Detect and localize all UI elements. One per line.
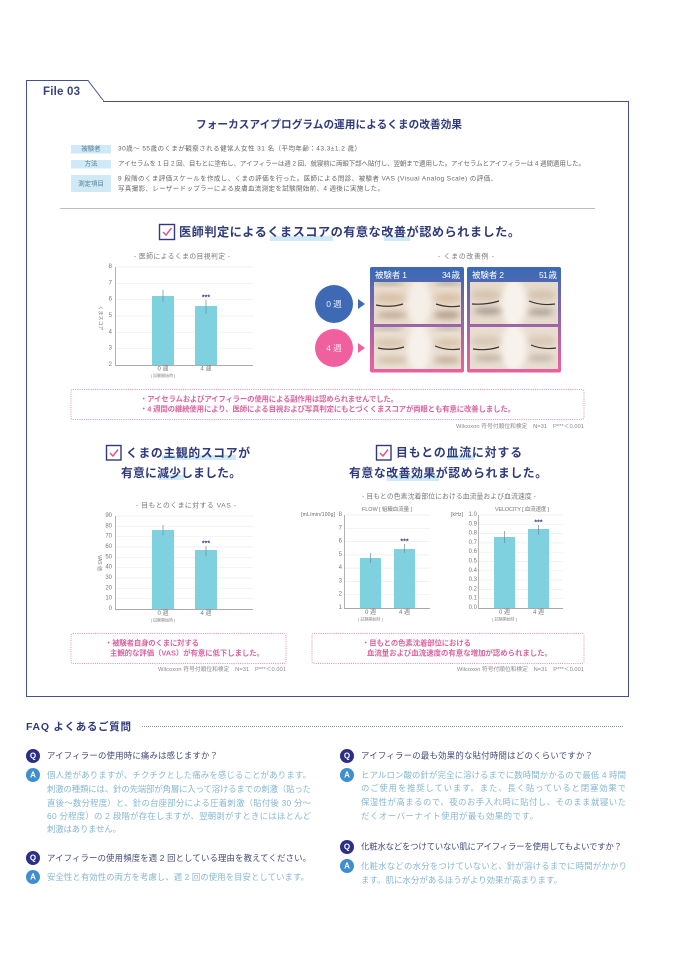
bar chart: flow: FLOW [ 組織血流量 ] [362, 505, 412, 513]
bar chart: doctor visual score: 8 [109, 264, 113, 270]
heading: blood flow: 有意な改善効果が認められました。 [349, 466, 547, 480]
bar chart: velocity: *** [534, 520, 543, 526]
callout: blood flow results: 血流量および血流速度の有意な増加が認められました。 [367, 648, 552, 658]
0 week circle [315, 285, 365, 323]
bar chart: velocity: 4 週 [533, 608, 544, 616]
measures row [71, 174, 497, 192]
bar chart: doctor visual score: - 医師によるくまの目視判定 - [134, 252, 230, 260]
panel: subject 1: 被験者 1 [375, 270, 407, 280]
FAQ 2: 安全性と有効性の両方を考慮し、週 2 回の使用を目安としています。 [47, 872, 309, 882]
panel: subject 2 [467, 267, 561, 372]
photo: subject 2 week 0 [470, 282, 558, 324]
bar chart: VAS score: 10 [105, 596, 113, 602]
bar chart: VAS score: 50 [105, 554, 113, 560]
icon: Q [340, 749, 354, 763]
method row: アイセラムを 1 日 2 回、目もとに塗布し、アイフィラーは週 2 回、就寝前に両眼下部へ貼付し、翌朝まで適用した。アイセラムとアイフィラーは 4 週間適用した。 [118, 158, 585, 168]
bar chart: doctor visual score: くまスコア [97, 305, 103, 331]
panel: subject 1: 34 歳 [442, 270, 460, 280]
measures row: 写真撮影、レーザードップラーによる皮膚血流測定を試験開始前、4 週後に実施した。 [118, 184, 384, 192]
bar chart: flow [301, 505, 430, 622]
callout: subjective results: ・被験者自身のくまに対する [105, 638, 199, 648]
bar chart: velocity: 0.5 [469, 558, 478, 564]
bar chart: velocity: 0.8 [469, 531, 478, 537]
bar chart: doctor visual score: *** [202, 294, 210, 302]
bar chart: doctor visual score: 4 [109, 329, 113, 335]
tab label: File 03 [43, 86, 80, 98]
answer text: 直後～数分程度）と、針の台座部分による圧着刺激（貼付後 30 分～ [47, 798, 312, 808]
study information [71, 144, 585, 192]
bar chart: doctor visual score [97, 252, 253, 378]
answer text: 刺激はありません。 [47, 824, 121, 834]
icon: A: A [30, 872, 36, 882]
icon: checkbox [106, 446, 121, 460]
bar chart: VAS score: 0 週 [157, 609, 169, 617]
bar chart: velocity: 0.6 [469, 549, 478, 555]
bar chart: flow: 0 週 [365, 608, 376, 616]
bar chart: flow: *** [400, 538, 409, 546]
panel: subject 1 [370, 267, 464, 372]
bar chart: velocity: 0.0 [469, 605, 478, 611]
answer text: ヒアルロン酸の針が完全に溶けるまでに数時間かかるので最低 4 時間 [361, 770, 626, 780]
answer text: 個人差がありますが、チクチクとした痛みを感じることがあります。 [47, 770, 311, 780]
icon: Q: Q [344, 842, 350, 852]
photo: subject 2 week 4 [470, 327, 558, 369]
bar chart: doctor visual score: 2 [109, 362, 113, 368]
FAQ 3 [340, 749, 626, 821]
bar chart: velocity: [kHz] [451, 512, 464, 518]
subjects row: 被験者 [81, 144, 101, 152]
before and after photo comparison [315, 252, 561, 372]
bar chart: flow: 6 [339, 539, 343, 545]
heading: subjective score: 有意に減少しました。 [121, 466, 241, 480]
title: フォーカスアイプログラムの運用によるくまの改善効果 [196, 118, 462, 131]
callout: doctor evaluation results: ・アイセラムおよびアイフィラーの使用による副作用は認められませんでした。 [140, 394, 398, 404]
icon: A [340, 768, 354, 782]
icon: Q [26, 851, 40, 865]
bar chart: VAS score: 30 [105, 575, 113, 581]
bar chart: flow: 2 [339, 592, 343, 598]
bar chart: velocity: 0.4 [469, 568, 478, 574]
icon: Q: Q [344, 752, 350, 760]
bar chart: velocity [451, 505, 563, 622]
icon: Q [340, 840, 354, 854]
bar chart: doctor visual score: 6 [109, 297, 113, 303]
bar chart: VAS score: 4 週 [200, 609, 212, 617]
bar chart: flow: [ 試験開始時 ] [358, 616, 383, 622]
before and after photo comparison: - くまの改善例 - [438, 252, 494, 260]
bar chart: VAS score: 0 [109, 606, 113, 612]
0 week circle: 0 週 [326, 299, 342, 309]
FAQ heading: FAQ よくあるご質問 [26, 720, 131, 733]
answer text: ます。肌に水分があるほうがより効果が高まります。 [361, 875, 562, 885]
bar chart: VAS score: 60 [105, 544, 113, 550]
bar chart: velocity: 0.2 [469, 586, 478, 592]
bar chart: VAS score: - 目もとのくまに対する VAS - [136, 500, 236, 510]
4 week circle [315, 329, 365, 367]
callout: subjective results: 主観的な評価（VAS）が有意に低下しました。 [110, 648, 264, 658]
bar chart: flow: 7 [339, 525, 343, 531]
bar chart: velocity: VELOCITY [ 血流速度 ] [495, 505, 549, 513]
subjects row [71, 144, 361, 154]
statistics note: Wilcoxon 符号付順位和検定 N=31 P***＜0.001 [457, 665, 584, 673]
answer text [47, 770, 312, 834]
answer text: 60 分程度）の 2 段階が存在しますが、翌朝剥がすときにはほとんど [47, 811, 312, 821]
icon: A: A [344, 770, 350, 780]
heading: subjective score [106, 446, 250, 480]
bar chart: velocity: 0.7 [469, 540, 478, 546]
bar chart: VAS score: 90 [105, 513, 113, 519]
bar chart: velocity: 0 週 [499, 608, 510, 616]
answer text: だくオーバーナイト使用が最も効果的です。 [361, 811, 538, 821]
answer text: のご使用を推奨しています。また、長く貼っていると閉塞効果で [361, 783, 626, 793]
File 03 tab and frame [26, 80, 628, 696]
icon: Q: Q [30, 752, 36, 760]
bar chart: VAS score: *** [202, 540, 210, 548]
callout: blood flow results [312, 634, 584, 664]
FAQ 2: アイフィラーの使用頻度を週 2 回としている理由を教えてください。 [47, 853, 311, 863]
FAQ 4: 化粧水などをつけていない肌にアイフィラーを使用してもよいですか？ [361, 842, 622, 852]
heading: subjective score: くまの主観的スコアが [126, 446, 250, 460]
bar chart: velocity: 0.9 [469, 521, 478, 527]
bar chart: velocity: 0.1 [469, 596, 478, 602]
answer text: 化粧水などの水分をつけていないと、針が溶けるまでに時間がかかり [361, 861, 627, 871]
bar chart: flow: 4 [339, 565, 343, 571]
bar chart: flow: [mL/min/100g] [301, 512, 336, 518]
4 week circle: 4 週 [326, 343, 342, 353]
callout: doctor evaluation results: ・4 週間の継続使用により、医師による目視および写真判定にもとづくくまスコアが両眼とも有意に改善しました。 [140, 404, 515, 414]
bar chart: doctor visual score: 3 [109, 346, 113, 352]
statistics note: Wilcoxon 符号付順位和検定 N=31 P***＜0.001 [158, 665, 286, 673]
bar chart: doctor visual score: 7 [109, 280, 113, 286]
photo: subject 1 week 4 [374, 327, 461, 369]
icon: A [26, 870, 40, 884]
icon: A: A [30, 770, 36, 780]
heading: blood flow: 目もとの血流に対する [396, 446, 522, 460]
bar chart: doctor visual score: 4 週 [200, 364, 212, 372]
bar chart: flow: 8 [339, 512, 343, 518]
icon: A [340, 859, 354, 873]
bar chart: VAS score: 80 [105, 523, 113, 529]
FAQ 4 [340, 840, 627, 885]
answer text: 保湿性が高まるので、夜のお手入れ時に貼付し、そのまま就寝いた [361, 797, 626, 807]
bar chart: velocity: 0.3 [469, 577, 478, 583]
answer text [361, 861, 627, 885]
bar chart: VAS score [96, 500, 253, 622]
FAQ 1 [26, 749, 312, 834]
bar chart: velocity: 1.0 [469, 512, 478, 518]
bar chart: doctor visual score: 5 [109, 313, 113, 319]
answer text: 刺激の種類には、針の先端部が角層に入って溶けるまでの刺激（貼った [47, 784, 311, 794]
answer text [361, 770, 626, 821]
bar chart: doctor visual score: 0 週 [157, 364, 169, 372]
FAQ 2 [26, 851, 311, 884]
panel: subject 2: 51 歳 [539, 270, 557, 280]
bar chart: doctor visual score: [ 試験開始時 ] [151, 372, 175, 378]
callout: subjective results [71, 634, 286, 664]
bar chart: VAS score: [ 試験開始時 ] [151, 616, 175, 622]
bar chart: flow: 1 [339, 605, 343, 611]
icon: A [26, 768, 40, 782]
callout: doctor evaluation results [71, 390, 584, 420]
bar chart: VAS score: VAS 値 [96, 555, 103, 571]
bar chart: VAS score: 20 [105, 585, 113, 591]
heading: blood flow [349, 446, 547, 481]
measures row: 9 段階のくま評価スケールを作成し、くまの評価を行った。医師による問診、被験者 VAS (Visual Analog Scale) の評価、 [118, 174, 497, 182]
method row [71, 158, 585, 168]
bar chart: flow: 3 [339, 578, 343, 584]
measures row: 測定項目 [78, 178, 104, 188]
icon: A: A [344, 862, 350, 870]
heading: doctor evaluation: 医師判定によるくまスコアの有意な改善が認められました。 [179, 224, 520, 239]
icon: Q [26, 749, 40, 763]
subjects row: 30歳～ 55歳のくまが観察される健常人女性 31 名（平均年齢：43.3±1.2 歳） [118, 144, 361, 152]
photo: subject 1 week 0 [374, 282, 461, 324]
bar chart: VAS score: 40 [105, 565, 113, 571]
statistics note: Wilcoxon 符号付順位和検定 N=31 P***＜0.001 [456, 422, 584, 430]
callout: blood flow results: ・目もとの色素沈着部位における [362, 638, 471, 648]
FAQ 1: アイフィラーの使用時に痛みは感じますか？ [47, 750, 218, 760]
bar chart: flow: 4 週 [399, 608, 410, 616]
bar chart: velocity: [ 試験開始時 ] [492, 616, 517, 622]
bar chart: VAS score: 70 [105, 534, 113, 540]
method row: 方法 [85, 158, 98, 168]
icon: checkbox [160, 224, 174, 240]
chart title: blood flow: - 目もとの色素沈着部位における血流量および血流速度 - [362, 492, 536, 500]
icon: checkbox [376, 446, 391, 460]
icon: Q: Q [30, 854, 36, 862]
bar chart: flow: 5 [339, 552, 343, 558]
FAQ 3: アイフィラーの最も効果的な貼付時間はどのくらいですか？ [361, 750, 593, 760]
panel: subject 2: 被験者 2 [472, 270, 504, 280]
